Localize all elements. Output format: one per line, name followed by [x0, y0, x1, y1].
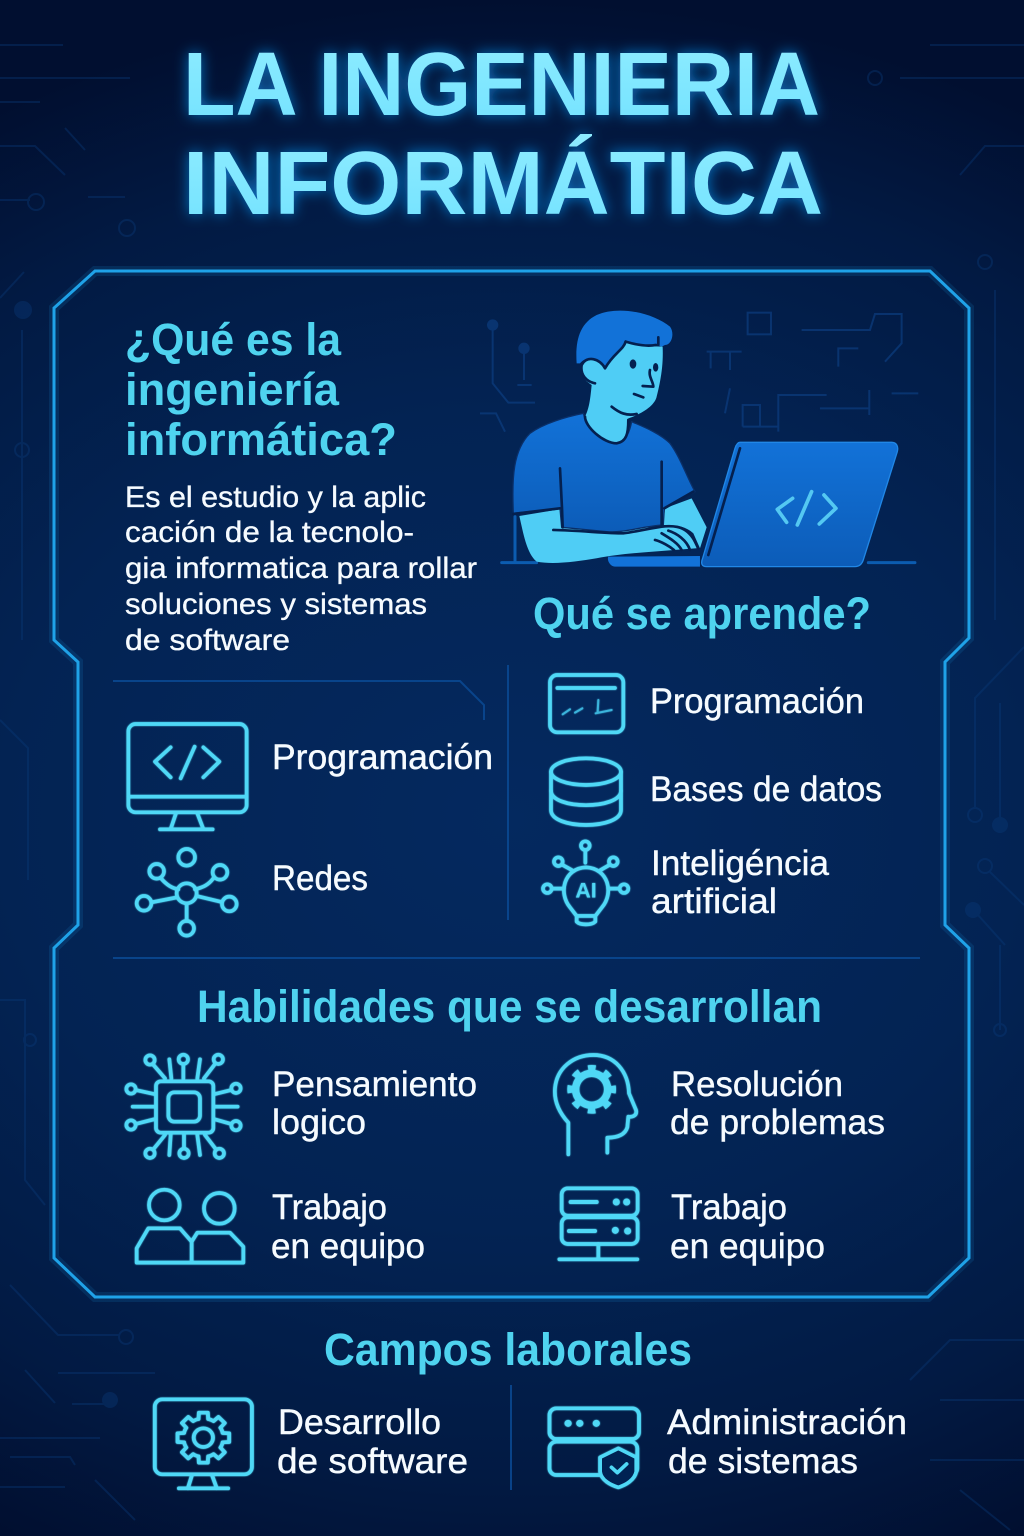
text block: definition: de software — [125, 624, 290, 657]
icon: chip — [126, 1055, 241, 1158]
label: Redes — [272, 859, 368, 898]
label — [670, 1188, 825, 1266]
faint circuit traces inside the panel — [480, 313, 918, 432]
heading: what is it: informática? — [125, 414, 397, 465]
icon: head with gear — [555, 1055, 636, 1154]
heading: skills: Habilidades que se desarrollan — [197, 981, 822, 1032]
label — [271, 1188, 425, 1266]
icon: AI bulb: AI — [575, 878, 597, 902]
label: logico — [272, 1103, 366, 1142]
heading: what is it: ingeniería — [125, 364, 340, 415]
icon: monitor with gear — [155, 1399, 252, 1488]
label: Pensamiento — [272, 1065, 477, 1104]
icon: server with shield — [549, 1408, 639, 1487]
label: de problemas — [670, 1103, 885, 1142]
label — [667, 1403, 907, 1481]
label: Desarrollo — [278, 1403, 441, 1442]
label — [272, 1065, 477, 1142]
label: en equipo — [670, 1227, 825, 1266]
text block: definition: cación de la tecnolo- — [125, 516, 414, 549]
label — [277, 1403, 468, 1481]
list item: programación, left — [128, 724, 493, 829]
title: LA INGENIERIA — [183, 35, 820, 135]
text block: definition: soluciones y sistemas — [125, 588, 427, 621]
icon: AI bulb — [543, 841, 628, 924]
list item: inteligencia artificial — [543, 841, 830, 924]
heading: what is it — [125, 314, 397, 465]
text block: definition — [125, 481, 477, 657]
label — [670, 1065, 885, 1142]
list item: bases de datos — [551, 758, 882, 825]
label: Trabajo — [272, 1188, 387, 1227]
icon: code window — [550, 675, 623, 732]
icon: people — [137, 1190, 243, 1263]
heading: what you learn: Qué se aprende? — [533, 588, 871, 639]
field: desarrollo de software — [155, 1399, 468, 1488]
text block: definition: gia informatica para rollar — [125, 552, 477, 585]
skill: resolución de problemas — [555, 1055, 885, 1154]
label: Resolución — [671, 1065, 843, 1104]
divider lines — [113, 665, 920, 958]
illustration: person with laptop — [502, 311, 915, 567]
label: Bases de datos — [650, 770, 882, 809]
label: de software — [277, 1442, 468, 1481]
label: Inteligéncia — [651, 844, 830, 883]
text block: definition: Es el estudio y la aplic — [125, 481, 426, 514]
label — [651, 844, 830, 921]
icon: server — [559, 1188, 638, 1259]
heading: job fields: Campos laborales — [324, 1324, 692, 1375]
icon: network — [137, 849, 237, 936]
field: administración de sistemas — [549, 1403, 907, 1487]
skill: trabajo en equipo, left — [137, 1188, 425, 1266]
label: en equipo — [271, 1227, 425, 1266]
list item: programación, right — [550, 675, 864, 732]
icon: code monitor — [128, 724, 247, 829]
icon: database — [551, 758, 621, 825]
main panel frame — [54, 271, 969, 1297]
label: Programación — [650, 682, 864, 721]
label: de sistemas — [668, 1442, 858, 1481]
heading: what is it: ¿Qué es la — [125, 314, 342, 365]
divider line — [510, 1385, 512, 1490]
list item: redes — [137, 849, 368, 936]
label: artificial — [651, 882, 777, 921]
title: INFORMÁTICA — [183, 133, 823, 234]
label: Trabajo — [671, 1188, 787, 1227]
skill: trabajo en equipo, right — [559, 1188, 825, 1266]
title — [183, 35, 823, 234]
skill: pensamiento lógico — [126, 1055, 477, 1158]
label: Programación — [272, 738, 493, 777]
label: Administración — [667, 1403, 907, 1442]
